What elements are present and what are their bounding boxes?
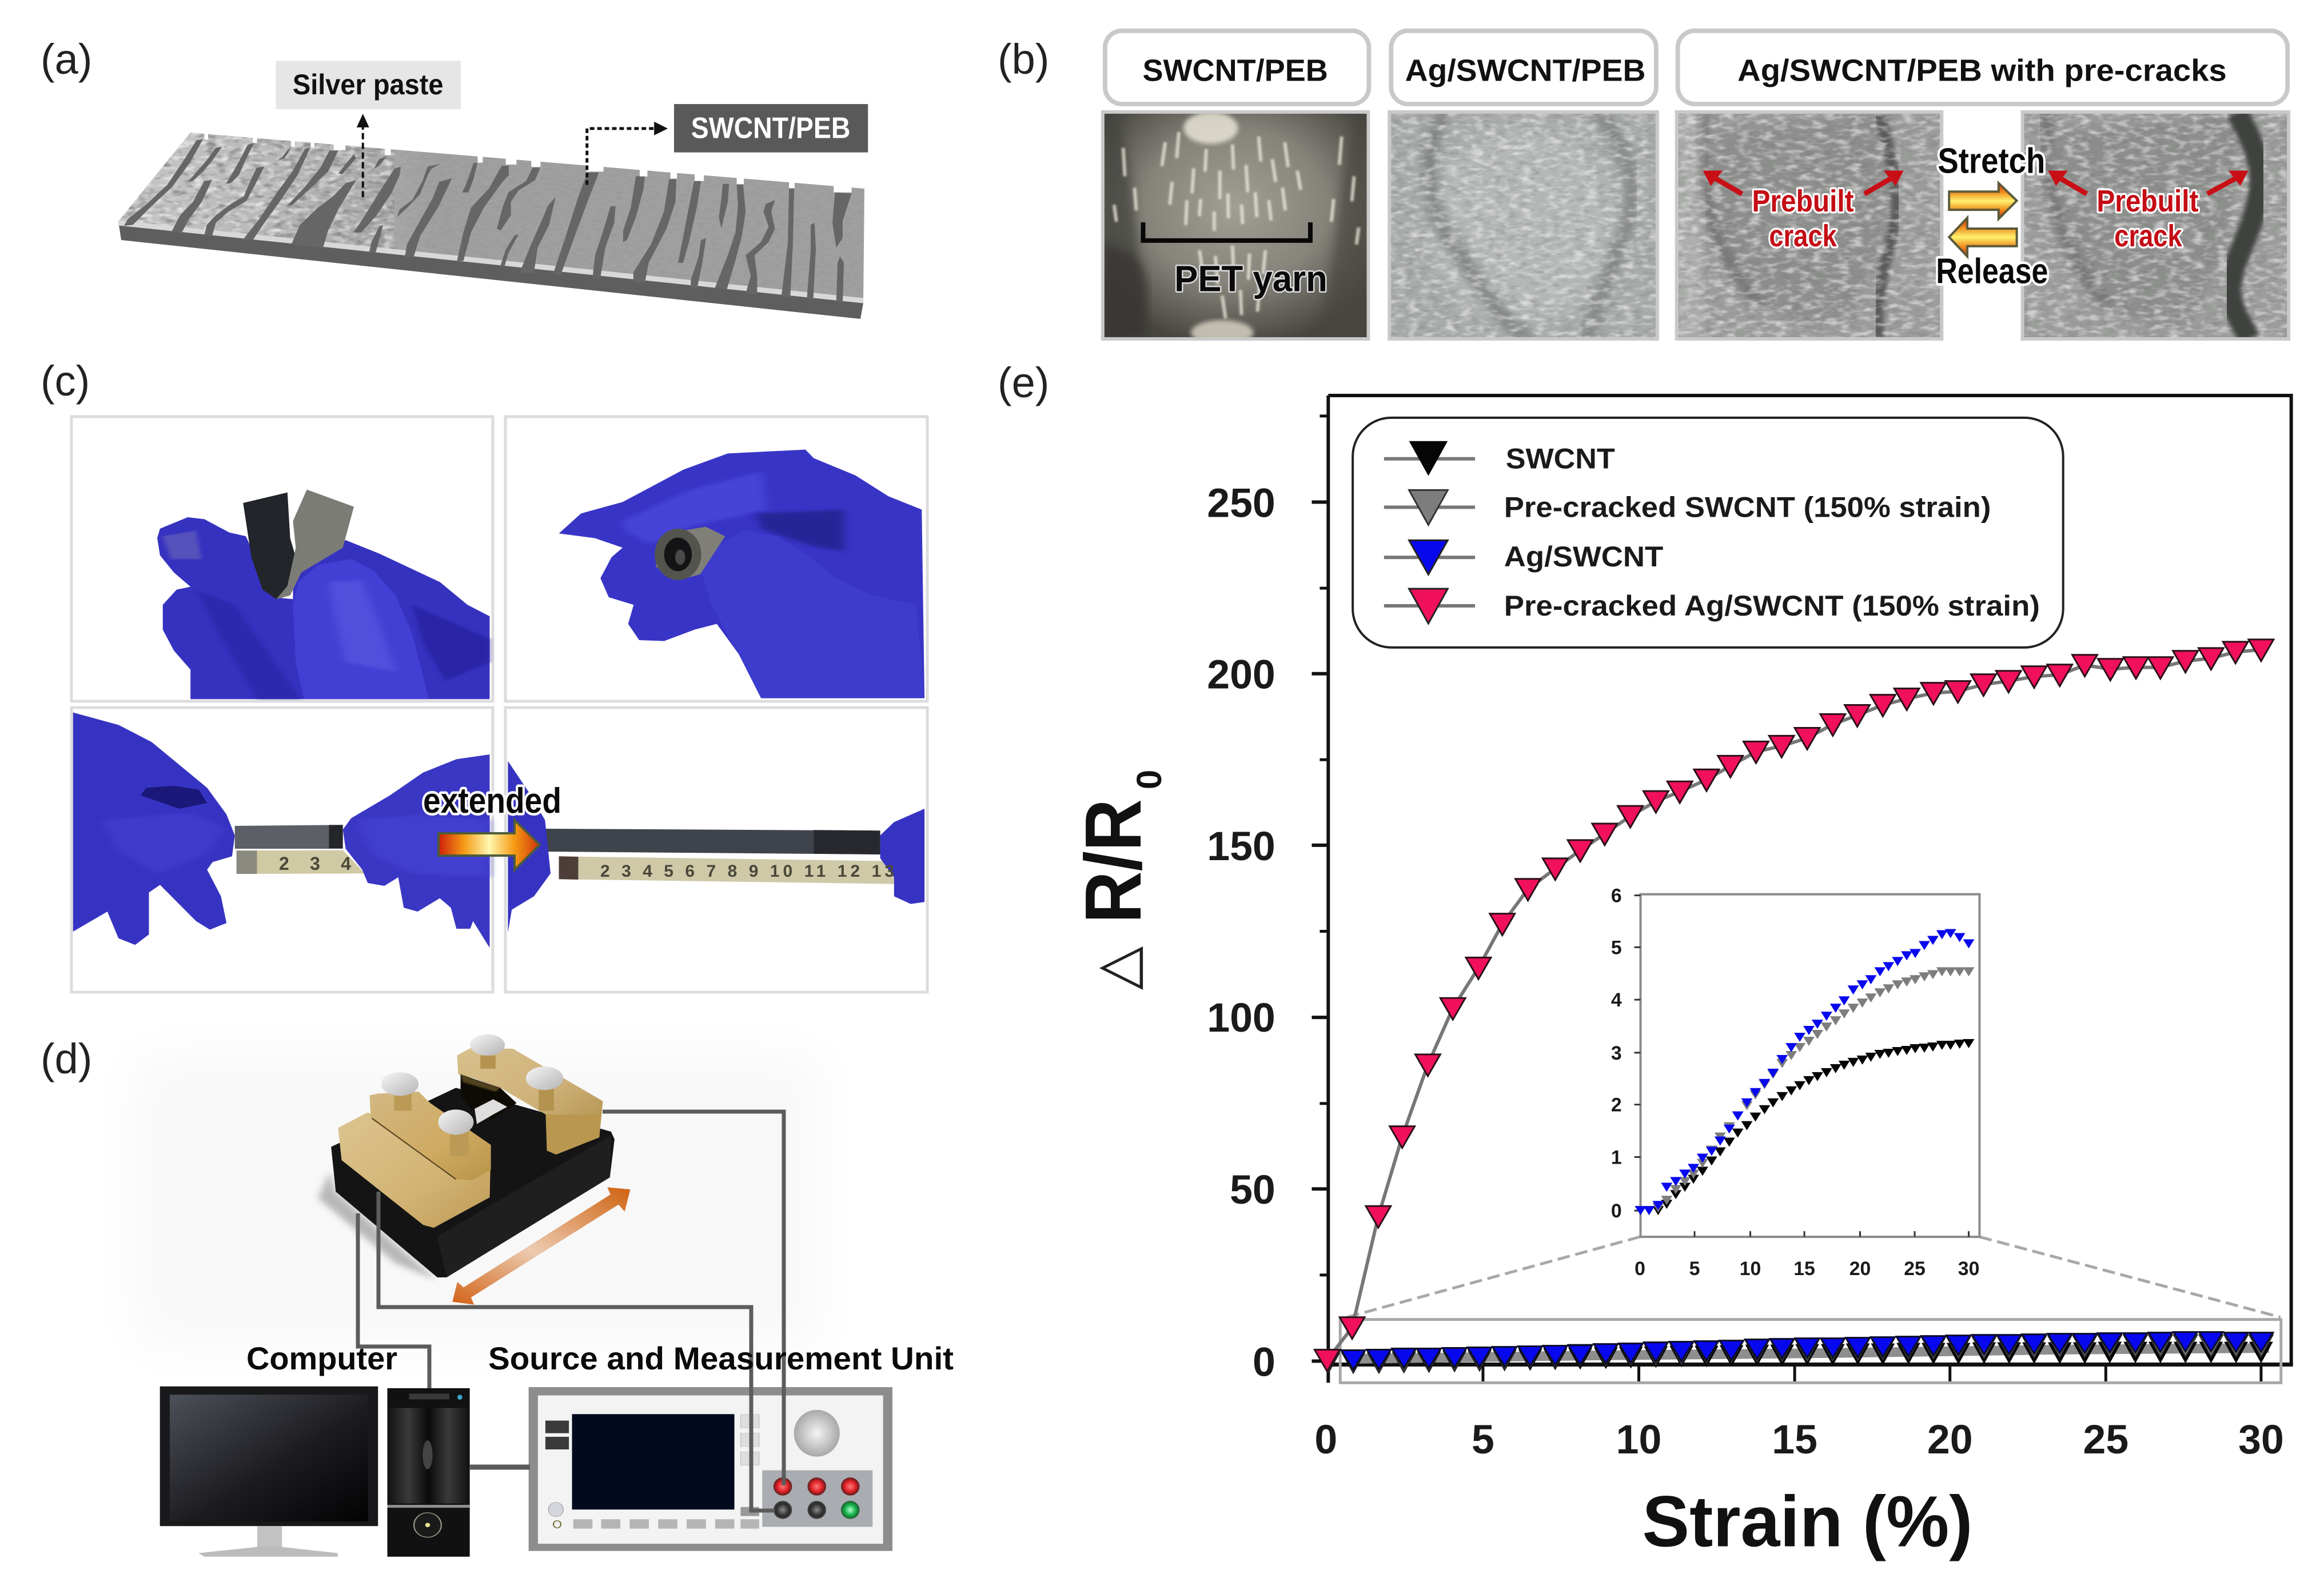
inset y tick labels: 0 [1611, 1200, 1622, 1222]
panel a: patterned strip with silver paste and SWCNT/PEB labels [109, 61, 869, 319]
source and measurement unit [529, 1387, 892, 1551]
panel c: glove photographs [71, 417, 927, 992]
inset y tick labels: 2 [1611, 1094, 1622, 1116]
y axis tick labels: 250 [1207, 480, 1275, 526]
legend: Pre-cracked SWCNT (150% strain) [1504, 491, 1991, 523]
wires [358, 1112, 784, 1511]
data series: SWCNT low-strain row [1316, 1342, 2273, 1374]
inset x tick labels [1635, 1258, 1979, 1280]
y axis tick labels [1207, 480, 1275, 1385]
label: computer: Computer [246, 1340, 397, 1376]
photo: unstretched strip with ruler [71, 708, 493, 992]
panel d: measurement setup [137, 1034, 954, 1557]
gray band behind low-strain markers [1353, 1348, 2269, 1359]
inset x tick labels: 30 [1958, 1258, 1979, 1280]
arrow: to silver paste [357, 114, 369, 197]
x axis title: Strain (%) [1643, 1480, 1973, 1562]
inset x tick labels: 25 [1904, 1258, 1926, 1280]
inset x tick labels: 20 [1849, 1258, 1871, 1280]
labels and callout arrows of panel a [276, 61, 868, 197]
inset series: Ag/SWCNT [1635, 929, 1975, 1215]
x axis tick labels: 15 [1772, 1417, 1817, 1463]
x axis tick labels: 5 [1472, 1417, 1494, 1463]
inset y tick labels: 1 [1611, 1146, 1622, 1168]
header: Ag/SWCNT/PEB with pre-cracks [1678, 31, 2287, 104]
label: SWCNT/PEB [674, 104, 868, 153]
inset x tick labels: 15 [1793, 1258, 1815, 1280]
micrograph: Ag/SWCNT/PEB [1389, 112, 1657, 339]
y axis tick labels: 200 [1207, 652, 1275, 698]
legend: Ag/SWCNT [1504, 541, 1663, 573]
black base [331, 1088, 615, 1277]
header: SWCNT/PEB: SWCNT/PEB [1142, 53, 1328, 87]
micrograph: SWCNT/PEB with PET yarn bracket: PET yarn [1174, 258, 1328, 299]
x axis tick labels: 0 [1314, 1417, 1337, 1463]
callout: prebuilt crack: Prebuilt [2096, 184, 2199, 218]
stretch and release arrows [1936, 141, 2048, 291]
data series: Ag/SWCNT low-strain row [1341, 1332, 2273, 1369]
test fixture illustration [318, 1034, 615, 1280]
x axis tick labels: 25 [2083, 1417, 2128, 1463]
inset y tick labels: 5 [1611, 937, 1622, 958]
photo: extended strip with ruler: 2 3 4 5 6 7 8 9 10 11 12 13 [600, 862, 894, 881]
inset series: pre-cracked SWCNT [1635, 967, 1975, 1215]
label: extended arrow: extended [423, 781, 561, 821]
y axis title: △ [1084, 946, 1150, 990]
micrograph: pre-cracked sample after stretching [2023, 112, 2289, 339]
computer monitor [160, 1387, 378, 1557]
soft backdrop [137, 1057, 818, 1343]
inset y tick labels: 3 [1611, 1042, 1622, 1064]
label: extended arrow [423, 781, 561, 870]
photo: unstretched strip with ruler: 2 3 4 [279, 853, 351, 874]
back gold clamp [457, 1034, 603, 1154]
data series: pre-cracked Ag/SWCNT curve [1314, 640, 2274, 1371]
callout: prebuilt crack: crack [2114, 219, 2182, 253]
panel e: resistance change versus strain chart [1069, 396, 2293, 1562]
strip 3D illustration [109, 129, 869, 319]
inset y tick labels: 4 [1611, 989, 1622, 1011]
y axis tick labels: 100 [1207, 995, 1275, 1041]
micrograph: SWCNT/PEB with PET yarn bracket [1103, 112, 1370, 345]
callout: prebuilt crack [2048, 170, 2249, 253]
callout: prebuilt crack: Prebuilt [1752, 184, 1854, 218]
photo: strip bent between fingers [71, 417, 493, 701]
x axis tick labels: 20 [1927, 1417, 1973, 1463]
y axis title: R/R [1069, 799, 1158, 924]
photo: extended strip with ruler [505, 708, 927, 992]
panel label: (a): (a) [41, 35, 92, 83]
header: Ag/SWCNT/PEB [1391, 31, 1656, 104]
arrow: stretching direction [452, 1187, 630, 1305]
panel label: (b): (b) [998, 35, 1049, 83]
photo: strip rolled between fingers [505, 417, 927, 701]
y axis tick labels: 0 [1253, 1339, 1275, 1385]
legend: Pre-cracked Ag/SWCNT (150% strain) [1504, 590, 2040, 622]
sample strip [475, 1099, 507, 1124]
inset x tick labels: 0 [1635, 1258, 1645, 1280]
x axis tick labels: 30 [2238, 1417, 2284, 1463]
y axis title: 0 [1130, 770, 1169, 789]
label: SWCNT/PEB: SWCNT/PEB [691, 111, 850, 145]
x axis tick labels [1314, 1417, 2284, 1463]
callout: prebuilt crack: crack [1769, 219, 1837, 253]
inset y tick labels: 6 [1611, 885, 1622, 907]
panel label: (c): (c) [41, 357, 90, 405]
header: Ag/SWCNT/PEB with pre-cracks: Ag/SWCNT/PEB with pre-cracks [1737, 53, 2227, 87]
front gold clamp [338, 1072, 491, 1228]
header: Ag/SWCNT/PEB: Ag/SWCNT/PEB [1405, 53, 1645, 87]
label: source and measurement unit: Source and Measurement Unit [488, 1340, 954, 1376]
stretch and release arrows: Release [1936, 251, 2048, 291]
callout: prebuilt crack [1703, 170, 1904, 253]
header: SWCNT/PEB [1105, 31, 1369, 104]
inset y tick labels [1611, 885, 1622, 1222]
inset x tick labels: 5 [1689, 1258, 1700, 1280]
legend [1353, 418, 2063, 648]
legend: SWCNT [1506, 443, 1615, 475]
inset chart [1611, 885, 1979, 1280]
stretch and release arrows: Stretch [1938, 141, 2045, 181]
zoom region box and guide lines [1340, 1237, 2281, 1383]
inset series: SWCNT [1635, 1039, 1975, 1215]
data series: pre-cracked SWCNT low-strain row [1316, 1335, 2273, 1372]
computer tower [388, 1388, 470, 1557]
inset x tick labels: 10 [1740, 1258, 1761, 1280]
label: silver paste: Silver paste [293, 69, 444, 101]
y axis tick labels: 50 [1230, 1167, 1275, 1213]
x axis tick labels: 10 [1616, 1417, 1661, 1463]
y axis title [1069, 770, 1169, 990]
panel label: (d): (d) [41, 1035, 92, 1082]
plot frame and axes [1312, 396, 2293, 1383]
panel b: microscope images [1103, 31, 2289, 345]
arrow: to SWCNT/PEB [587, 122, 668, 185]
micrograph: pre-cracked sample before stretching [1677, 112, 1942, 339]
panel label: (e): (e) [998, 359, 1049, 406]
y axis tick labels: 150 [1207, 824, 1275, 869]
label: silver paste [276, 61, 461, 109]
